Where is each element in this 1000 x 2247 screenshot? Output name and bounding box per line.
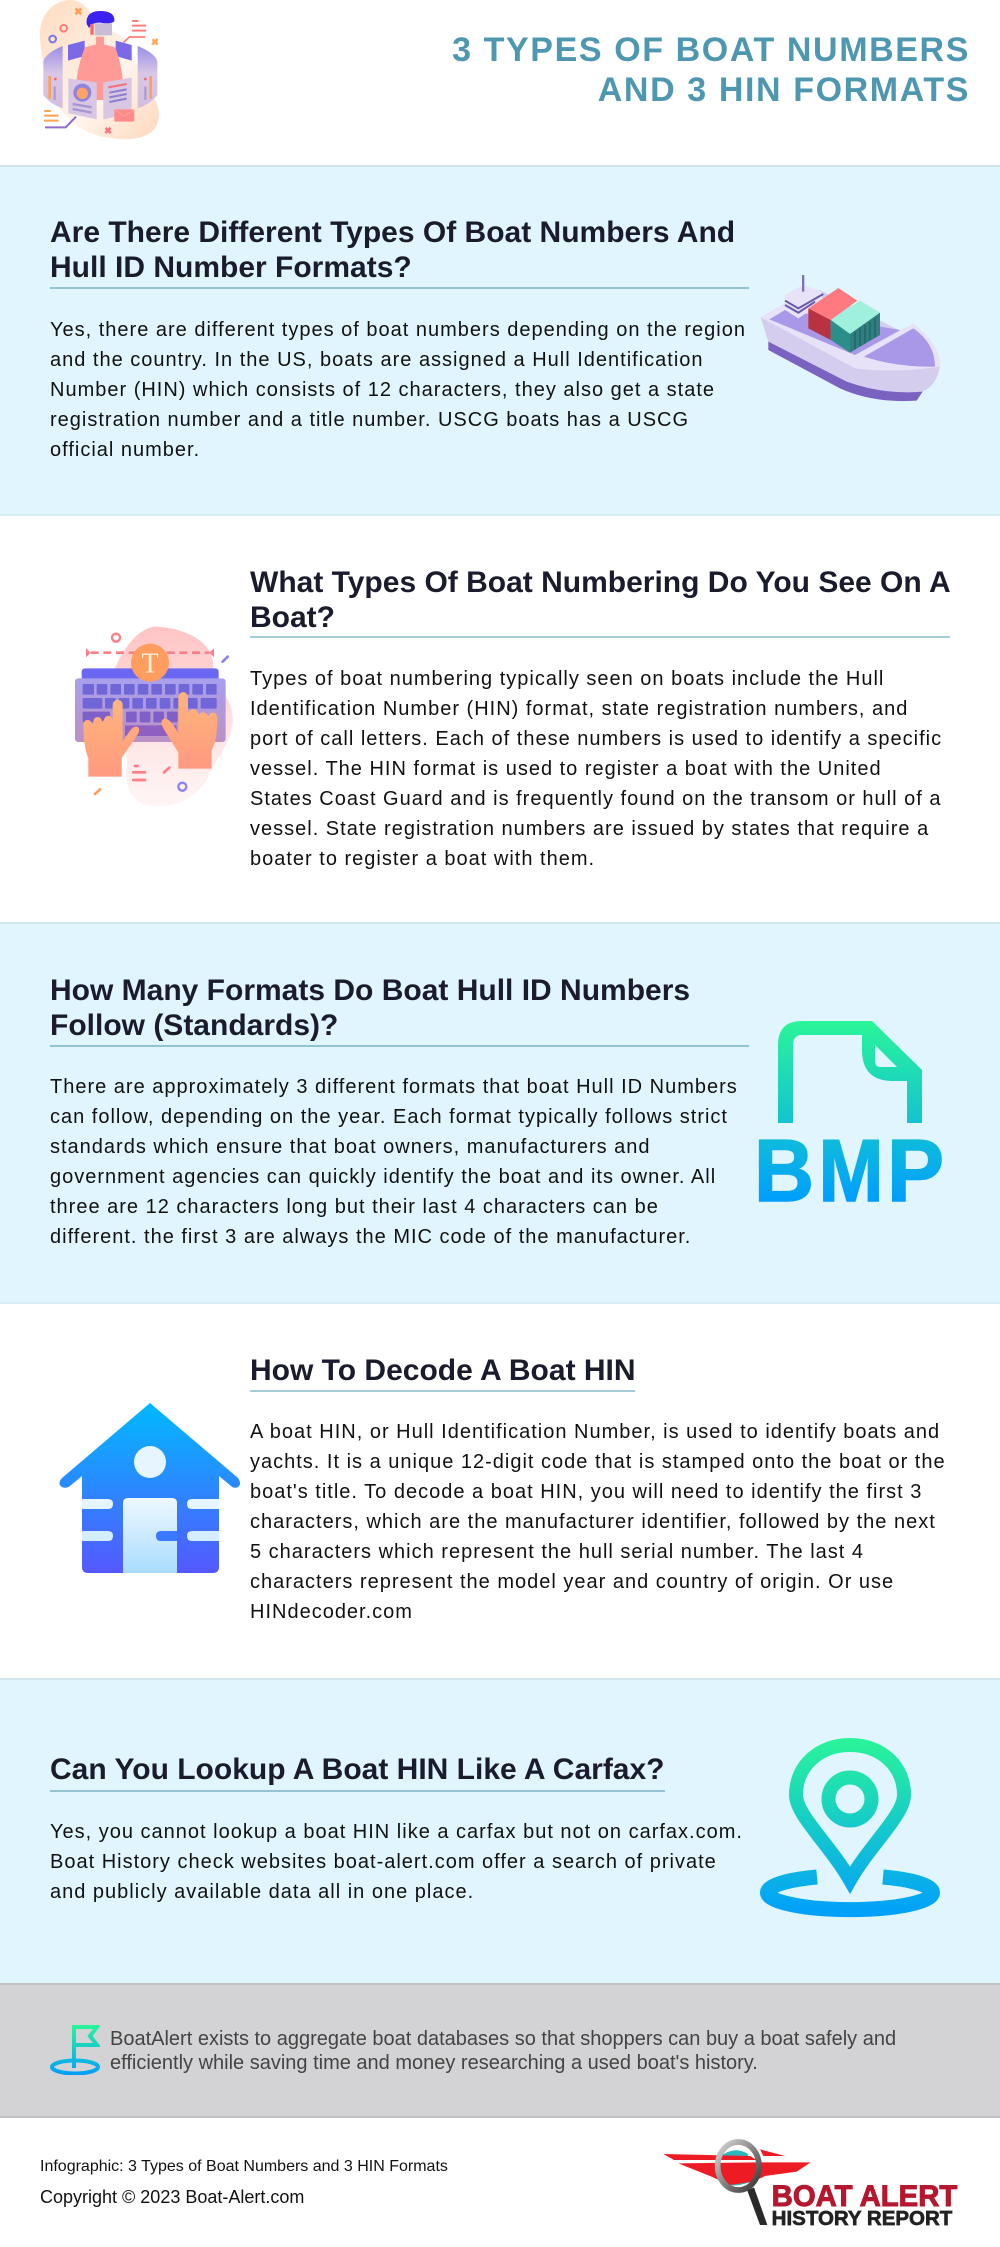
body text: yachts. It is a unique 12-digit code that is stamped onto the boat or the (250, 1451, 946, 1473)
body text (50, 1821, 743, 1903)
body text: HINdecoder.com (250, 1601, 413, 1623)
heading: Hull ID Number Formats? (50, 250, 412, 284)
body text: boat's title. To decode a boat HIN, you will need to identify the first 3 (250, 1481, 922, 1503)
heading: Boat? (250, 600, 335, 634)
body text: three are 12 characters long but their last 4 characters can be (50, 1196, 659, 1218)
body text: Yes, there are different types of boat numbers depending on the region (50, 319, 746, 341)
callout text (110, 2028, 896, 2074)
callout text: efficiently while saving time and money researching a used boat's history. (110, 2052, 758, 2074)
body text: Number (HIN) which consists of 12 characters, they also get a state (50, 379, 715, 401)
body text (250, 668, 942, 870)
body text: characters, which are the manufacturer identifier, followed by the next (250, 1511, 936, 1533)
underline rule (250, 1390, 635, 1392)
body text: official number. (50, 439, 200, 461)
logo: HISTORY REPORT (772, 2207, 953, 2230)
icon: BMP file (754, 1021, 944, 1210)
heading (50, 974, 690, 1042)
body text: Yes, you cannot lookup a boat HIN like a carfax but not on carfax.com. (50, 1821, 743, 1843)
heading: Follow (Standards)? (50, 1008, 338, 1042)
body text: A boat HIN, or Hull Identification Number, is used to identify boats and (250, 1421, 940, 1443)
panel: carfax lookup (0, 1678, 1000, 1983)
panel: formats (0, 922, 1000, 1302)
icon: location pin (760, 1738, 940, 1918)
logo (664, 2139, 958, 2230)
heading: What Types Of Boat Numbering Do You See On A (250, 566, 951, 599)
icon: person with floating documents (40, 0, 159, 140)
heading: Are There Different Types Of Boat Numbers And (50, 216, 735, 249)
icon: keyboard and hands: T (141, 649, 159, 680)
body text: Types of boat numbering typically seen on boats include the Hull (250, 668, 884, 690)
body text: port of call letters. Each of these numbers is used to identify a specific (250, 728, 942, 750)
heading: How Many Formats Do Boat Hull ID Numbers (50, 974, 690, 1007)
underline rule (50, 1790, 665, 1792)
callout text: BoatAlert exists to aggregate boat databases so that shoppers can buy a boat safely and (110, 2028, 896, 2050)
source credit: Infographic: 3 Types of Boat Numbers and 3 HIN Formats (40, 2158, 448, 2175)
icon: house (60, 1403, 240, 1573)
panel: decode (0, 1302, 1000, 1678)
logo: BOAT ALERT (772, 2180, 957, 2213)
body text (250, 1421, 946, 1623)
icon: container ship (760, 275, 940, 402)
icon: flag (50, 2025, 100, 2075)
heading: Can You Lookup A Boat HIN Like A Carfax? (50, 1753, 665, 1786)
icon: keyboard and hands (75, 626, 233, 806)
body text: characters represent the model year and country of origin. Or use (250, 1571, 894, 1593)
body text: States Coast Guard and is frequently found on the transom or hull of a (250, 788, 941, 810)
body text: vessel. The HIN format is used to register a boat with the United (250, 758, 882, 780)
title (452, 31, 970, 109)
copyright: Copyright © 2023 Boat-Alert.com (40, 2187, 304, 2207)
heading (250, 566, 951, 634)
heading (50, 216, 735, 284)
header (0, 0, 1000, 165)
panel: about BoatAlert (0, 1983, 1000, 2118)
body text: different. the first 3 are always the MIC code of the manufacturer. (50, 1226, 691, 1248)
body text: and publicly available data all in one place. (50, 1881, 474, 1903)
body text: government agencies can quickly identify the boat and its owner. All (50, 1166, 716, 1188)
body text: boater to register a boat with them. (250, 848, 595, 870)
body text: and the country. In the US, boats are assigned a Hull Identification (50, 349, 704, 371)
body text: There are approximately 3 different formats that boat Hull ID Numbers (50, 1076, 738, 1098)
body text: can follow, depending on the year. Each format typically follows strict (50, 1106, 728, 1128)
underline rule (250, 636, 950, 638)
heading: How To Decode A Boat HIN (250, 1354, 636, 1387)
underline rule (50, 1045, 749, 1047)
body text: vessel. State registration numbers are issued by states that require a (250, 818, 929, 840)
panel: different types (0, 165, 1000, 514)
body text: Boat History check websites boat-alert.com offer a search of private (50, 1851, 717, 1873)
underline rule (50, 287, 749, 289)
title: 3 TYPES OF BOAT NUMBERS (452, 31, 970, 69)
panel: numbering types (0, 514, 1000, 922)
body text: standards which ensure that boat owners, manufacturers and (50, 1136, 651, 1158)
body text: registration number and a title number. USCG boats has a USCG (50, 409, 689, 431)
body text (50, 1076, 738, 1248)
body text (50, 319, 746, 461)
body text: Identification Number (HIN) format, state registration numbers, and (250, 698, 908, 720)
body text: 5 characters which represent the hull serial number. The last 4 (250, 1541, 864, 1563)
footer (0, 2118, 1000, 2247)
title: AND 3 HIN FORMATS (598, 71, 970, 109)
